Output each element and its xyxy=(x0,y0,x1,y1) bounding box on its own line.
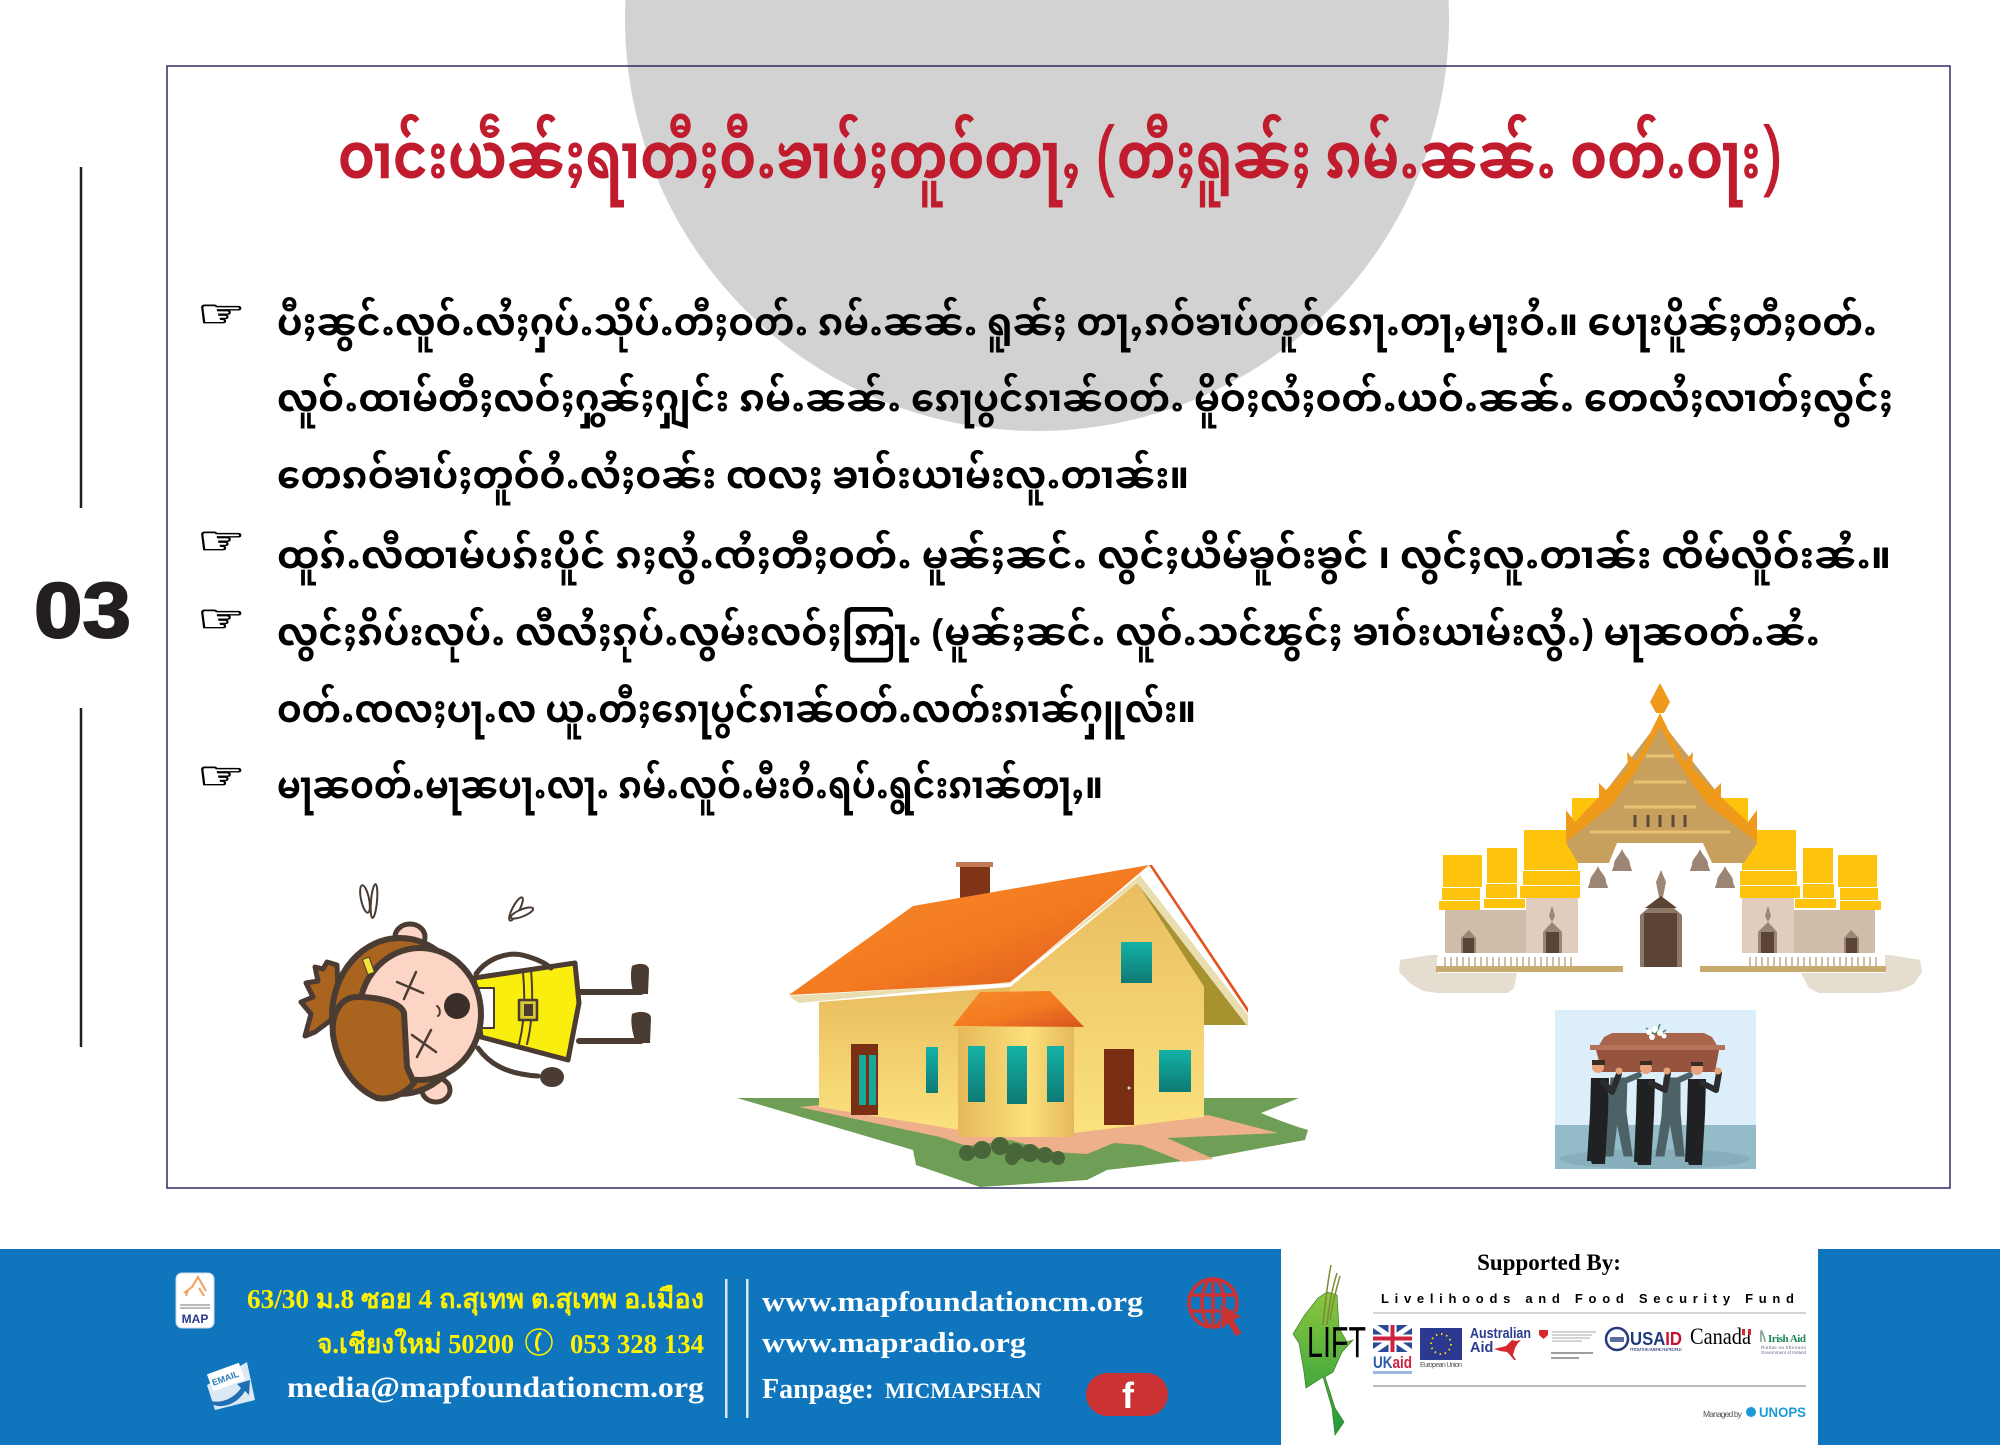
title: တီႈရူၼ်ႈ ၵမ်ႉၼၼ်ႉ ဝတ်ႉဝႃး xyxy=(1117,94,1761,234)
USAID logo: USAID xyxy=(1630,1329,1682,1349)
bullet 2: ထူၵ်ႉလီထၢမ်ပၵ်းပိူင် ၵႈလွႆႉၸႆႈတီႈဝတ်ႉ မူၼ်ႈၼင်ႉ လွင်ႈယိမ်ၶူဝ်းၶွင် ၊ လွင်ႈလူႉတၢၼ်း ၸိမ်လိူဝ်းၼႆႉ။ xyxy=(277,518,1891,601)
body xyxy=(474,963,579,1060)
title: ဝၢင်းယဵၼ်ႈရၢတီႈဝီႉၶၢပ်ႈတူဝ်တႃႇ xyxy=(338,94,1239,234)
main door xyxy=(1640,896,1682,967)
illustration: temple xyxy=(1399,683,1922,993)
address: 63/30 ม.8 ซอย 4 ถ.สุเทพ ต.สุเทพ อ.เมือง xyxy=(247,1284,704,1316)
LIFT logo: LIFT xyxy=(1307,1318,1366,1367)
footer links xyxy=(762,1279,1242,1416)
radio website: www.mapradio.org xyxy=(762,1327,1027,1359)
Australian Aid logo xyxy=(1470,1326,1531,1360)
illustration: fallen cartoon girl xyxy=(301,884,651,1102)
doors xyxy=(851,1044,1134,1125)
bullet 1: ☞ xyxy=(197,291,245,337)
icon: email envelope: EMAIL xyxy=(211,1369,241,1388)
LIFT logo xyxy=(1293,1265,1366,1435)
bullet 1 xyxy=(197,285,1893,521)
European Union logo: European Union xyxy=(1420,1362,1462,1369)
city and phone: 053 328 134 xyxy=(570,1329,704,1359)
closed eyes xyxy=(397,972,436,1057)
main roof xyxy=(789,865,1149,995)
icon: facebook button xyxy=(1086,1373,1168,1416)
managed by UNOPS: Managed by xyxy=(1703,1409,1743,1419)
ponytail xyxy=(301,962,339,1036)
icon: globe cursor xyxy=(1189,1279,1242,1337)
legs xyxy=(579,992,641,1041)
bullet 1: တေၵဝ်ၶၢပ်ႈတူဝ်ဝႆႉလႆႈဝၼ်း ၸလႈ ၶၢဝ်းယၢမ်းလူႉတၢၼ်း။ xyxy=(277,438,1189,521)
coffin xyxy=(1590,1033,1725,1072)
website: www.mapfoundationcm.org xyxy=(762,1286,1144,1318)
walls xyxy=(819,987,1010,1130)
dizzy marks xyxy=(358,884,534,922)
background bearers xyxy=(1605,1075,1690,1156)
base blobs xyxy=(1399,955,1517,993)
bullet 3: ဝတ်ႉၸလႈပႃႉလ ယူႉတီႈၵေႃပွင်ၵၢၼ်ဝတ်ႉလတ်းၵၢၼ်ႁူလ်း။ xyxy=(277,672,1196,755)
section number: 03 xyxy=(34,566,131,654)
arms xyxy=(476,954,551,974)
ears xyxy=(395,924,425,950)
email: media@mapfoundationcm.org xyxy=(287,1371,704,1404)
city and phone xyxy=(317,1328,704,1359)
finial xyxy=(1650,683,1670,713)
managed by UNOPS: UNOPS xyxy=(1759,1404,1806,1420)
bullet 1: ပီႈၼွင်ႉလူဝ်ႉလႆႈႁပ်ႉသိုပ်ႉတီႈဝတ်ႉ ၵမ်ႉၼၼ်ႉ ရူၼ်ႈ တႃႇၵဝ်ၶၢပ်တူဝ်ၵေႃႉတႃႇမႃးဝႆႉ။ ပေႃးပိူၼ်ႈတီႈဝတ်ႉ xyxy=(277,285,1877,368)
footer contact xyxy=(176,1273,704,1410)
Canada logo: Canada xyxy=(1690,1324,1751,1349)
bells xyxy=(1588,849,1735,897)
left wing xyxy=(1439,830,1580,953)
USAID logo xyxy=(1606,1328,1682,1352)
USAID logo: FROM THE AMERICAN PEOPLE xyxy=(1630,1347,1682,1352)
illustration: house xyxy=(737,862,1308,1187)
roof trim xyxy=(789,875,1248,1027)
hair back xyxy=(332,938,468,1094)
bullet 3 xyxy=(197,595,1820,755)
shrub xyxy=(959,1137,1065,1165)
olive gable xyxy=(1137,883,1248,1025)
orange bargeboards xyxy=(1566,713,1757,842)
footer band xyxy=(0,1249,2000,1445)
fanpage: Fanpage: MICMAPSHAN xyxy=(762,1374,1042,1405)
bullet 4: မႃၼဝတ်ႉမႃၼပႃႉလႃႉ ၵမ်ႉလူဝ်ႉမီးဝႆႉရပ်ႉရွင်းၵၢၼ်တႃႇ။ xyxy=(277,748,1103,831)
managed by UNOPS xyxy=(1703,1404,1806,1420)
icon: MAP foundation logo xyxy=(176,1273,214,1328)
fund name: Livelihoods and Food Security Fund xyxy=(1381,1291,1794,1306)
foreground bearers xyxy=(1587,1060,1722,1165)
path xyxy=(799,1105,1278,1162)
title: ( xyxy=(1096,74,1117,257)
flowers xyxy=(1646,1024,1666,1040)
Swiss agency logo xyxy=(1539,1330,1596,1358)
Irish Aid logo: Government of Ireland xyxy=(1761,1350,1806,1355)
chimney xyxy=(956,862,993,918)
central gable xyxy=(1566,720,1757,863)
UK aid logo xyxy=(1373,1325,1412,1374)
bullet list xyxy=(197,285,1893,831)
bay xyxy=(958,1027,1074,1137)
Irish Aid logo xyxy=(1761,1330,1806,1355)
city and phone: จ.เชียงใหม่ 50200 xyxy=(317,1328,514,1359)
icon: email envelope xyxy=(203,1362,255,1410)
bullet 4: ☞ xyxy=(197,753,245,799)
footer dividers xyxy=(725,1279,748,1418)
title: ) xyxy=(1761,74,1782,257)
bullet 3: လွင်ႈၵိပ်းလုပ်ႉ လီလႆႈၵုပ်ႉလွမ်းလဝ်ႈဢြႃႉ (မူၼ်ႈၼင်ႉ လူဝ်ႉသင်ၽွင်ႈ ၶၢဝ်းယၢမ်းလွႆႉ) မႃၼဝတ်ႉၼႆႉ xyxy=(277,595,1820,678)
Irish Aid logo: Irish Aid xyxy=(1768,1333,1806,1345)
icon: MAP foundation logo: MAP xyxy=(182,1312,208,1326)
lawn xyxy=(737,1098,1308,1187)
UK aid logo: UKaid xyxy=(1373,1354,1412,1372)
mouth xyxy=(444,993,470,1019)
illustration: pallbearers carrying coffin xyxy=(1555,1010,1756,1169)
bullet 3: ☞ xyxy=(197,596,245,642)
right wing xyxy=(1740,830,1881,953)
Irish Aid logo: Rialtas na hÉireann xyxy=(1761,1344,1806,1350)
Australian Aid logo: Aid xyxy=(1470,1340,1493,1356)
decorative grey circle xyxy=(625,0,1449,431)
windows xyxy=(926,942,1191,1104)
supporters panel xyxy=(1293,1250,1806,1435)
front hair xyxy=(333,997,414,1098)
small upper yellow roofs xyxy=(1572,798,1748,835)
Australian Aid logo: Australian xyxy=(1470,1326,1531,1342)
balustrades xyxy=(1436,957,1886,972)
European Union logo xyxy=(1420,1328,1462,1369)
heading: Supported By: xyxy=(1477,1250,1621,1275)
bullet 2: ☞ xyxy=(197,518,245,564)
bullet 1: လူဝ်ႉထၢမ်တီႈလဝ်ႈႁွၼ်ႈႁျင်း ၵမ်ႉၼၼ်ႉ ၵေႃပွင်ၵၢၼ်ဝတ်ႉ မိူဝ်ႈလႆႈဝတ်ႉယဝ်ႉၼၼ်ႉ တေလႆႈလၢတ်ႈလွင်ႈ xyxy=(277,361,1893,444)
icon: facebook button: f xyxy=(1122,1375,1135,1416)
face xyxy=(359,948,481,1080)
panel: main content frame xyxy=(167,66,1950,1188)
